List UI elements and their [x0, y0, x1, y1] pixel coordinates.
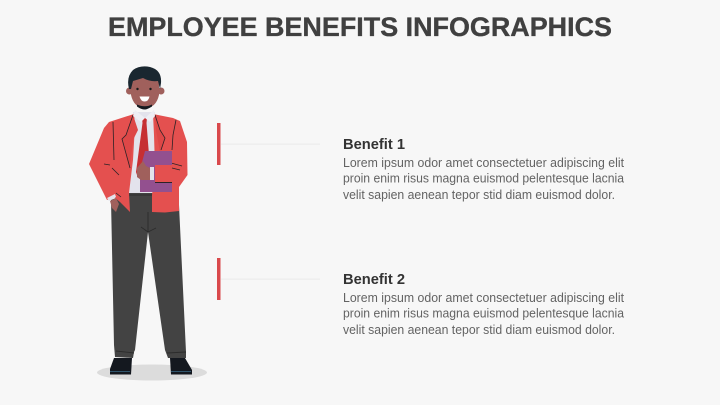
trousers: [111, 193, 186, 358]
shirt: [128, 112, 155, 193]
ground shadow: [97, 364, 207, 380]
shirt cuff near folder: [150, 167, 154, 180]
text block: benefit 2: [343, 272, 625, 337]
text block: benefit 1: Lorem ipsum odor amet consectetuer adipiscing elit: [343, 156, 625, 170]
marker: benefit 2: [217, 258, 320, 300]
tie: [136, 118, 149, 178]
shoes: [110, 358, 192, 374]
hand in pocket: [110, 198, 119, 212]
text block: benefit 2: Lorem ipsum odor amet consectetuer adipiscing elit: [343, 291, 625, 305]
text block: benefit 1: velit sapien aenean tepor stid diam euismod dolor.: [343, 188, 615, 202]
head: [126, 66, 164, 110]
hair: [128, 66, 161, 89]
collar: [133, 110, 155, 122]
shirt cuff: [107, 194, 116, 201]
text block: benefit 1: proin enim risus magna euismod pelentesque lacnia: [343, 172, 624, 186]
text block: benefit 2: Benefit 2: [343, 272, 405, 288]
beard: [137, 104, 152, 110]
hand holding folder: [137, 161, 150, 180]
purple folder: [140, 151, 172, 192]
text block: benefit 2: proin enim risus magna euismod pelentesque lacnia: [343, 306, 624, 320]
text block: benefit 2: velit sapien aenean tepor stid diam euismod dolor.: [343, 323, 615, 337]
text block: benefit 1: [343, 137, 625, 202]
eyes: [136, 88, 139, 90]
title: EMPLOYEE BENEFITS INFOGRAPHICS: [108, 12, 612, 42]
marker: benefit 1: [217, 123, 320, 165]
illustration: businessman: [89, 66, 207, 380]
smile: [140, 96, 150, 102]
text block: benefit 1: Benefit 1: [343, 137, 405, 153]
jacket: [89, 114, 188, 212]
